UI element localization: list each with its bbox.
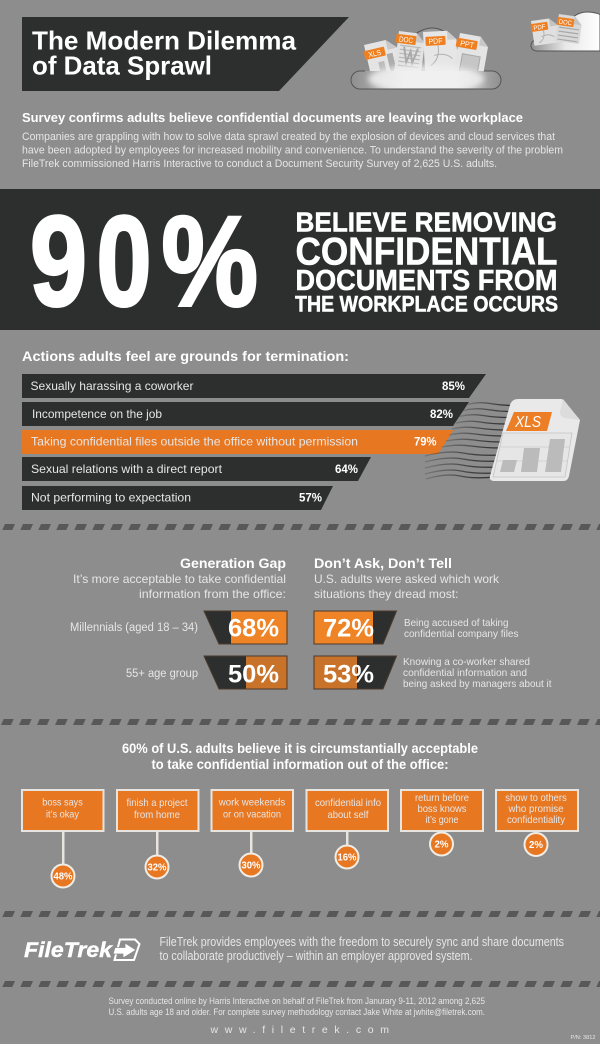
survey footnote xyxy=(108,996,485,1018)
part number: P/N: 3812 xyxy=(570,1035,596,1041)
title banner: of Data Sprawl xyxy=(32,50,212,80)
intro paragraph: FileTrek commissioned Harris Interactive to conduct a Document Security Survey of 2,625 U.S. adults. xyxy=(22,158,497,170)
bar: incompetence xyxy=(22,402,469,426)
item: return before boss knows 2%: boss knows xyxy=(418,803,466,815)
big statistic 90%: 9 xyxy=(30,190,87,334)
bar: incompetence: 82% xyxy=(430,407,453,421)
item: confidential info 16% xyxy=(306,790,388,868)
survey footnote: U.S. adults age 18 and older. For complete survey methodology contact Jake White at jwhite@filetrek.com. xyxy=(108,1007,485,1018)
stat: 55+ 50%: 50% xyxy=(228,660,279,688)
item: finish a project 32%: 32% xyxy=(148,862,167,874)
icon: small PDF document: PDF xyxy=(533,24,546,32)
chart: acceptable reasons with pin percentages xyxy=(22,790,578,888)
stat: 72% xyxy=(314,611,518,644)
item: show to others 2% xyxy=(496,790,578,856)
item: confidential info 16%: confidential info xyxy=(315,797,381,809)
item: boss says it's okay 48% xyxy=(22,790,104,888)
motion lines behind XLS file xyxy=(425,403,514,479)
bar: taking confidential files (highlighted): Taking confidential files outside the office without permission xyxy=(31,434,358,448)
icon: XLS document xyxy=(362,38,404,84)
divider xyxy=(0,981,600,987)
don't ask heading: Don’t Ask, Don’t Tell xyxy=(314,555,452,571)
divider xyxy=(0,524,600,530)
icon: PDF document xyxy=(423,30,458,74)
stat: millennials 68% xyxy=(70,611,287,644)
icon: logo arrow xyxy=(113,940,140,960)
bar: not performing: 57% xyxy=(299,490,322,504)
company description: to collaborate productively – within an employer approved system. xyxy=(160,949,472,963)
item: boss says it's okay 48%: it’s okay xyxy=(46,808,80,820)
heading: circumstantially acceptable: 60% of U.S. adults believe it is circumstantially acceptable xyxy=(122,741,478,756)
item: work weekends 30%: 30% xyxy=(242,860,261,872)
FileTrek logo xyxy=(24,939,140,962)
item: boss says it's okay 48%: 48% xyxy=(54,870,73,882)
icon: PPT document xyxy=(451,33,490,80)
item: finish a project 32% xyxy=(117,790,198,878)
website: www.filetrek.com xyxy=(210,1024,389,1036)
icon: PPT document: PPT xyxy=(459,39,475,50)
company description xyxy=(160,935,564,963)
intro paragraph xyxy=(22,131,563,170)
icon: XLS spreadsheet file xyxy=(490,399,580,481)
stat: 72%: Being accused of taking xyxy=(404,617,509,629)
stat: 72%: confidential company files xyxy=(404,628,518,640)
generation gap heading: Generation Gap xyxy=(180,555,286,571)
survey footnote: Survey conducted online by Harris Interactive on behalf of FileTrek from Janurary 9-11, 2012 among 2,625 xyxy=(108,996,485,1007)
icon: small DOC document: DOC xyxy=(558,19,573,27)
intro paragraph: have been adopted by employees for increased mobility and convenience. To understand the severity of the problem xyxy=(22,144,563,156)
banner statement: THE WORKPLACE OCCURS xyxy=(295,292,558,317)
stat: 55+ 50%: 55+ age group xyxy=(126,668,198,680)
divider xyxy=(0,911,600,917)
bar: sexual relations xyxy=(22,457,371,481)
heading: grounds for termination: Actions adults feel are grounds for termination: xyxy=(22,348,349,364)
item: return before boss knows 2%: 2% xyxy=(434,838,449,850)
big statistic 90%: % xyxy=(162,190,258,334)
stat: millennials 68%: Millennials (aged 18 – 34) xyxy=(70,622,198,634)
bar: not performing xyxy=(22,486,333,510)
bar: sexually harassing: Sexually harassing a coworker xyxy=(30,379,194,393)
banner statement: DOCUMENTS FROM xyxy=(296,265,558,297)
item: return before boss knows 2%: return before xyxy=(415,792,469,804)
intro paragraph: Companies are grappling with how to solve data sprawl created by the explosion of devices and cloud services that xyxy=(22,131,555,143)
banner statement: BELIEVE REMOVING xyxy=(296,207,557,238)
FileTrek logo: FileTrek xyxy=(24,939,113,962)
bar: sexual relations: 64% xyxy=(335,462,358,476)
icon: XLS spreadsheet file: XLS xyxy=(514,414,541,431)
stat: 53%: Knowing a co-worker shared xyxy=(403,656,530,668)
stat: 53%: confidential information and xyxy=(403,667,527,679)
bar chart: grounds for termination xyxy=(22,374,486,510)
item: show to others 2%: who promise xyxy=(508,803,564,815)
generation gap heading xyxy=(73,555,286,601)
stat: 72%: 72% xyxy=(323,614,374,642)
don't ask heading xyxy=(314,555,500,601)
bar: taking confidential files (highlighted) xyxy=(22,430,454,454)
panel: generation gap xyxy=(70,555,287,689)
banner statement xyxy=(295,207,558,317)
item: finish a project 32%: finish a project xyxy=(126,797,188,809)
bar: sexual relations: Sexual relations with a direct report xyxy=(31,462,223,476)
heading: circumstantially acceptable: to take confidential information out of the office: xyxy=(152,757,448,772)
bar: sexually harassing: 85% xyxy=(442,379,465,393)
generation gap heading: information from the office: xyxy=(139,587,286,601)
panel: 90 percent banner xyxy=(0,189,600,334)
title banner: The Modern Dilemma xyxy=(32,26,297,56)
banner statement: CONFIDENTIAL xyxy=(296,231,558,274)
panel: don't ask, don't tell xyxy=(314,555,552,690)
item: confidential info 16%: 16% xyxy=(338,852,357,864)
bar: taking confidential files (highlighted): 79% xyxy=(414,434,437,448)
don't ask heading: U.S. adults were asked which work xyxy=(314,572,500,586)
icon: DOC document xyxy=(392,31,426,76)
icon: large cloud with documents xyxy=(351,28,501,93)
icon: PDF document: PDF xyxy=(428,36,443,46)
divider xyxy=(0,719,600,725)
don't ask heading: situations they dread most: xyxy=(314,587,458,601)
item: work weekends 30%: work weekends xyxy=(218,796,285,808)
title banner xyxy=(22,17,349,91)
big statistic 90%: 0 xyxy=(96,190,152,334)
intro text xyxy=(22,110,563,170)
item: work weekends 30% xyxy=(212,790,293,876)
item: confidential info 16%: about self xyxy=(328,809,369,821)
icon: DOC document: DOC xyxy=(398,34,414,45)
item: show to others 2%: confidentiality xyxy=(507,814,566,826)
item: boss says it's okay 48%: boss says xyxy=(42,796,83,808)
item: return before boss knows 2%: it’s gone xyxy=(426,814,459,826)
item: return before boss knows 2% xyxy=(401,790,483,856)
item: show to others 2%: 2% xyxy=(529,839,544,851)
item: finish a project 32%: from home xyxy=(134,809,180,821)
stat: 55+ 50% xyxy=(126,656,287,689)
icon: small cloud with documents xyxy=(530,12,600,51)
item: work weekends 30%: or on vacation xyxy=(223,808,281,820)
bar: not performing: Not performing to expectation xyxy=(31,490,191,504)
intro heading: Survey confirms adults believe confidential documents are leaving the workplace xyxy=(22,110,523,125)
stat: millennials 68%: 68% xyxy=(228,614,279,642)
item: show to others 2%: show to others xyxy=(505,792,567,804)
heading: circumstantially acceptable xyxy=(122,741,478,772)
icon: XLS document: XLS xyxy=(367,48,382,59)
bar: sexually harassing xyxy=(22,374,486,398)
bar: incompetence: Incompetence on the job xyxy=(32,407,162,421)
generation gap heading: It’s more acceptable to take confidential xyxy=(73,572,286,586)
stat: 53%: being asked by managers about it xyxy=(403,678,552,690)
stat: 53% xyxy=(314,656,552,690)
stat: 53%: 53% xyxy=(323,660,374,688)
